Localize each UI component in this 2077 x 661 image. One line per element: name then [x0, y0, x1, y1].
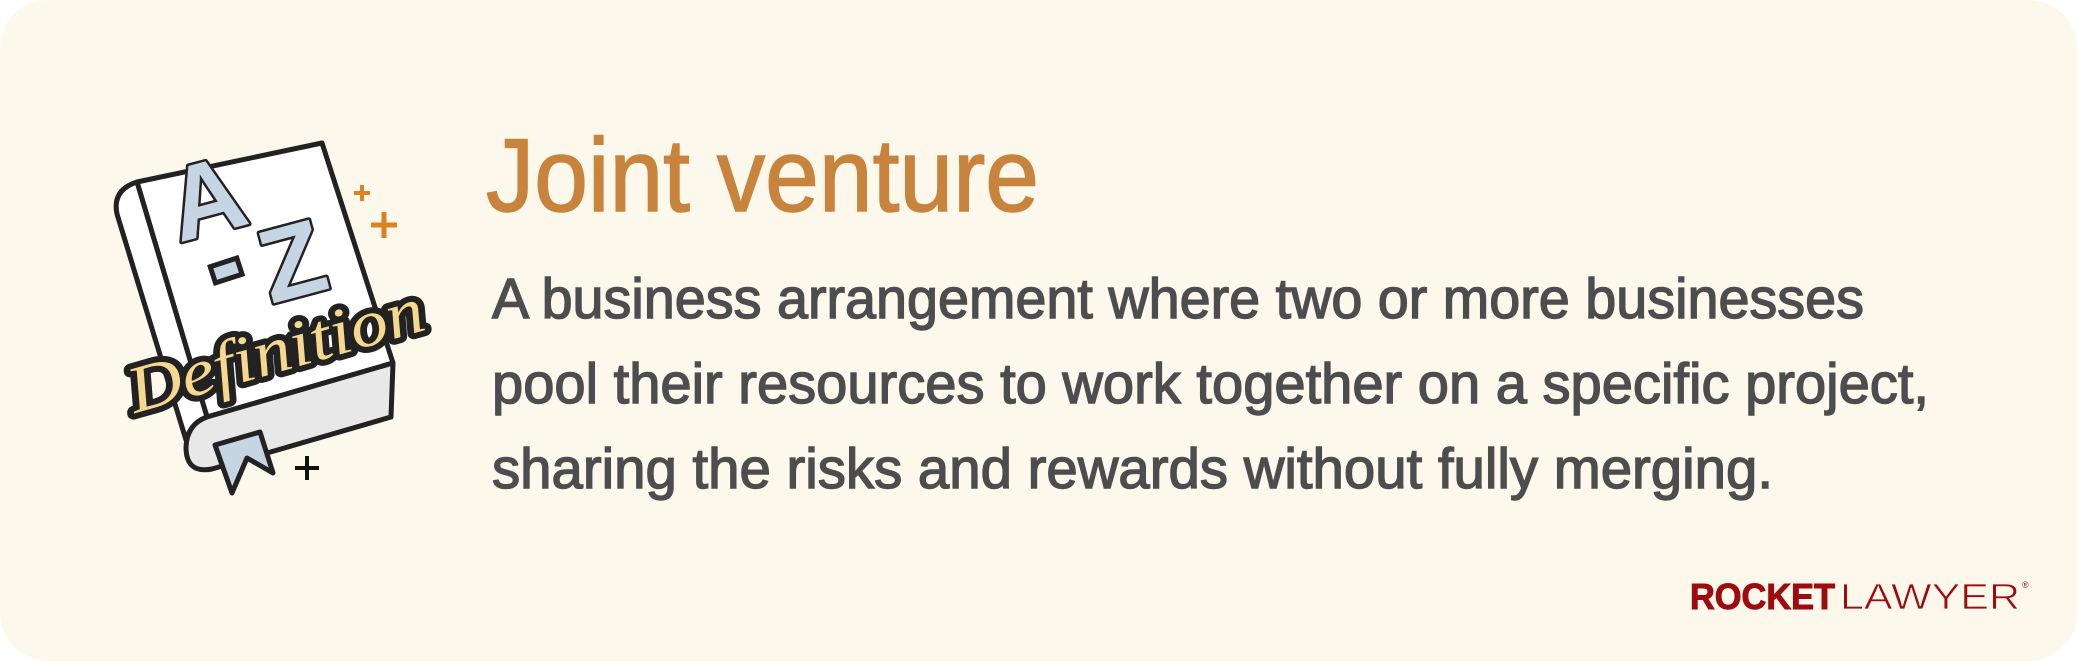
logo: Rocket Lawyer: ®	[2022, 580, 2029, 590]
definition text	[492, 267, 1929, 501]
title: Joint venture	[486, 118, 1039, 234]
bookmark ribbon	[215, 432, 273, 493]
definition text: A business arrangement where two or more businesses	[492, 267, 1864, 331]
logo: Rocket Lawyer: LAWYER	[1840, 576, 2020, 617]
letter Z: Z	[247, 198, 338, 326]
icon: A-Z definition book	[116, 133, 432, 493]
book cover	[137, 143, 393, 417]
sparkle plus orange small	[354, 185, 370, 201]
definition text: sharing the risks and rewards without fully merging.	[492, 437, 1773, 501]
logo: Rocket Lawyer	[1690, 576, 2029, 617]
sparkle plus orange large	[371, 212, 397, 238]
Definition script label: Definition	[118, 273, 432, 428]
book pages strip	[186, 363, 393, 470]
book left spine	[116, 182, 207, 440]
letter A: A	[155, 133, 258, 265]
definition text: pool their resources to work together on a specific project,	[492, 352, 1929, 416]
sparkle plus black	[295, 456, 319, 480]
dash	[210, 258, 242, 283]
logo: Rocket Lawyer: ROCKET	[1690, 576, 1835, 617]
